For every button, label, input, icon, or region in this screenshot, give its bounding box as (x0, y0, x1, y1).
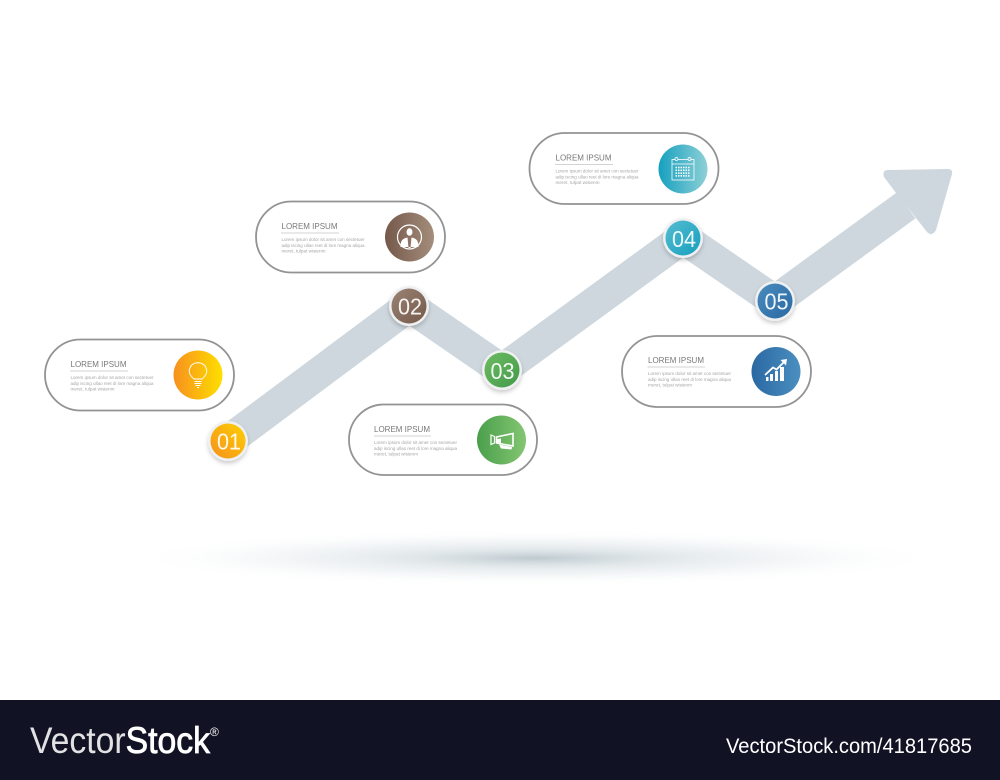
icon: calendar (658, 144, 708, 194)
card 5 body text: meret, tulpat wisienm (648, 382, 692, 388)
card 2 body text: meret, tulpat wisienm (282, 248, 326, 254)
card 4 heading: LOREM IPSUM (556, 152, 612, 162)
card 4 body text: meret, tulpat wisienm (556, 180, 600, 185)
card 1 heading: LOREM IPSUM (70, 359, 127, 369)
card 1 body text: Lorem ipsum dolor sit amet con sectetuer (70, 375, 154, 380)
zigzag growth arrow (228, 169, 952, 441)
footer logo: VectorStock (30, 720, 210, 761)
marker 01 (208, 421, 248, 461)
card 4 body text: adip iscing ullao reet di lore magna aliqua (556, 174, 639, 180)
card 5 heading: LOREM IPSUM (648, 355, 704, 365)
icon: business person (385, 212, 434, 262)
card 4 body text (556, 168, 639, 185)
card 5 body text: Lorem ipsum dolor sit amet con sectetuer (648, 371, 731, 376)
card 1 (45, 340, 234, 410)
ground shadow (125, 530, 945, 586)
marker 03 (482, 350, 522, 390)
card 5 body text: adip iscing ullao reet di lore magna aliqua (648, 377, 731, 382)
card 3 body text: adip iscing ullao reet di lore magna aliqua (374, 446, 457, 451)
card 3 body text: meret, tulpat wisienm (374, 452, 418, 456)
footer image id: VectorStock.com/41817685 (726, 735, 972, 758)
card 4 (530, 133, 718, 204)
marker 04: 04 (672, 226, 696, 252)
card 4 body text: Lorem ipsum dolor sit amet con sectetuer (556, 168, 639, 174)
card 1 body text: meret, tulpat wisienm (70, 386, 115, 392)
icon: megaphone (477, 416, 526, 464)
card 1 body text: adip iscing ullao reet di lore magna aliqua (70, 381, 154, 386)
card 3 body text (374, 440, 457, 456)
card 2 (256, 202, 445, 272)
icon: rising bar chart (752, 347, 800, 396)
card 2 body text (282, 237, 365, 254)
card 2 heading: LOREM IPSUM (282, 221, 338, 231)
registered mark: ® (210, 725, 219, 739)
card 3 (349, 404, 537, 475)
icon: light bulb (174, 350, 222, 400)
card 5 body text (648, 371, 731, 388)
card 5 (622, 336, 811, 407)
marker 02 (389, 286, 429, 326)
marker 05 (755, 281, 795, 321)
card 3 body text: Lorem ipsum dolor sit amet con sectetuer (374, 440, 457, 445)
card 2 body text: Lorem ipsum dolor sit amet con sectetuer (282, 237, 365, 242)
card 2 body text: adip iscing ullao reet di lore magna aliqua (282, 243, 365, 248)
marker 03: 03 (490, 358, 514, 384)
marker 02: 02 (398, 294, 422, 320)
marker 04 (663, 218, 703, 258)
marker 05: 05 (764, 288, 788, 314)
marker 01: 01 (217, 428, 241, 454)
card 3 heading: LOREM IPSUM (374, 424, 430, 434)
card 1 body text (70, 375, 154, 392)
footer bar (0, 700, 1000, 780)
